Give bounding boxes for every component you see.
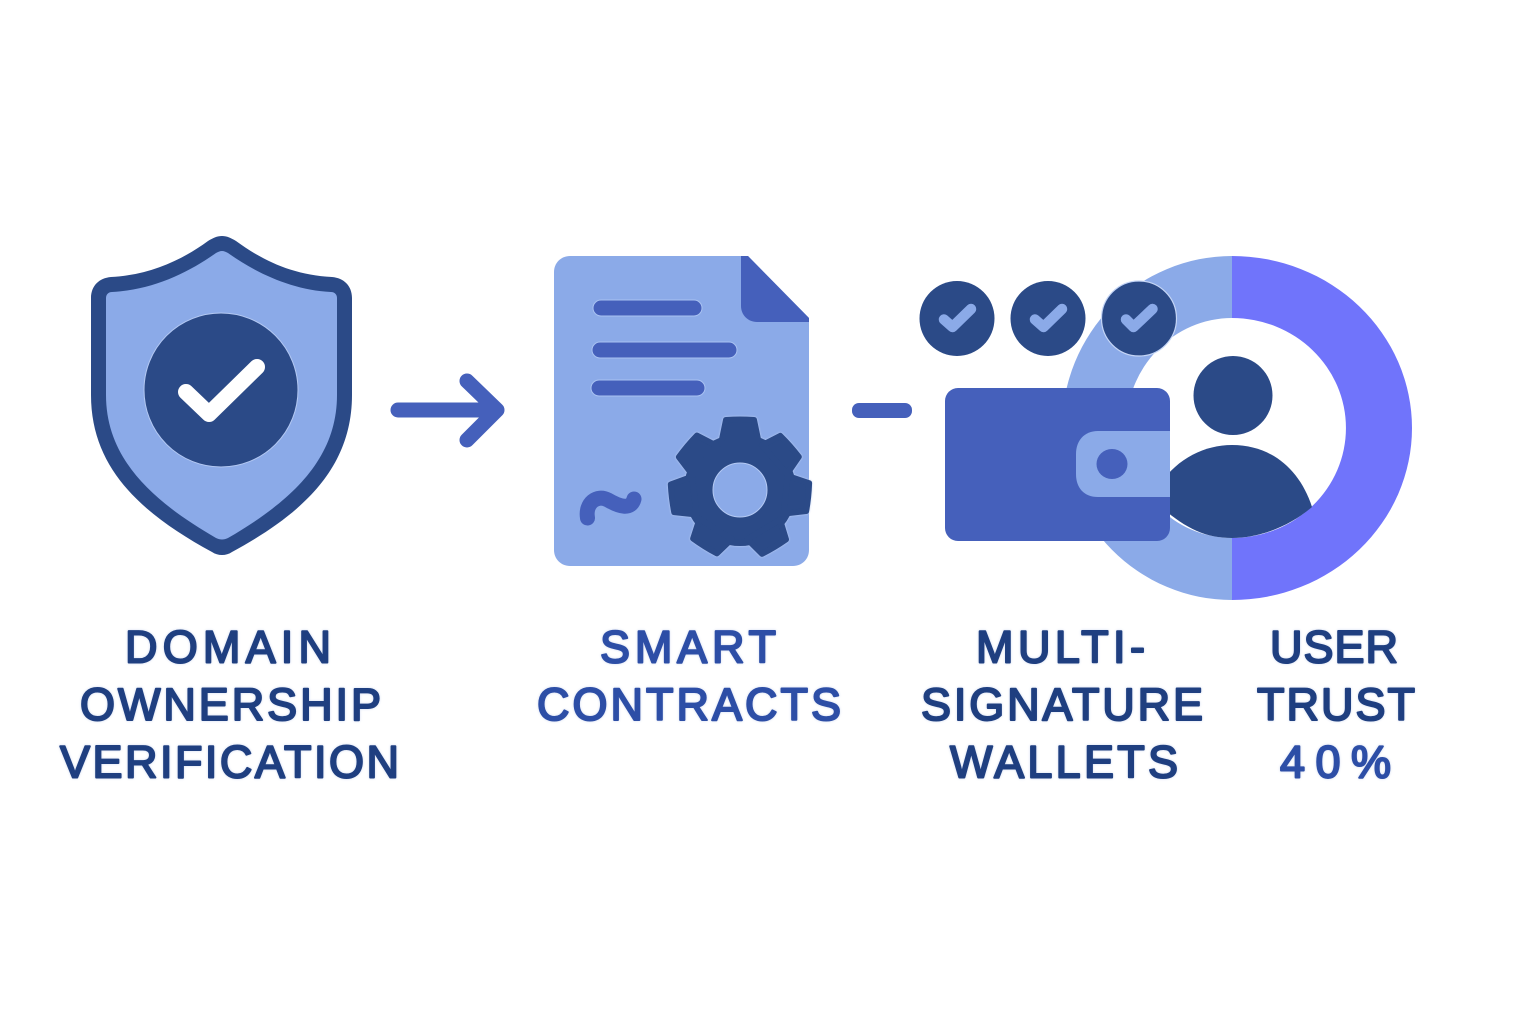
icon: signature check 3 — [1102, 281, 1176, 356]
label: smart contracts: SMART — [600, 622, 776, 672]
gear — [670, 420, 810, 557]
icon: shield with check — [91, 236, 352, 555]
label: domain ownership verification: VERIFICATION — [60, 736, 399, 788]
label: smart contracts: CONTRACTS — [537, 679, 841, 730]
label: domain ownership verification — [60, 622, 399, 788]
arrow: shield to contract — [398, 381, 497, 440]
chart: user trust donut — [1062, 256, 1412, 600]
icon: smart contract document — [554, 256, 810, 566]
icon: user — [1160, 356, 1312, 538]
wallet button — [1096, 449, 1128, 479]
document folded corner — [741, 256, 809, 322]
label: multi-signature wallets: SIGNATURE — [921, 679, 1203, 730]
connector dash — [852, 403, 912, 418]
signature squiggle — [587, 498, 634, 518]
label: user trust 40% — [1257, 622, 1415, 788]
label: multi-signature wallets — [921, 622, 1203, 788]
label: user trust 40%: USER — [1270, 622, 1398, 672]
label: domain ownership verification: DOMAIN — [125, 622, 331, 672]
label: multi-signature wallets: MULTI- — [976, 622, 1145, 672]
label: user trust 40%: 40% — [1280, 736, 1391, 788]
label: multi-signature wallets: WALLETS — [950, 736, 1178, 788]
icon: signature check 2 — [1010, 281, 1086, 356]
wallet clasp — [1076, 431, 1170, 497]
document text lines — [591, 300, 737, 396]
icon: wallet — [945, 388, 1170, 541]
label: smart contracts — [537, 622, 841, 730]
label: domain ownership verification: OWNERSHIP — [80, 679, 381, 730]
icon: signature check 1 — [920, 281, 994, 356]
label: user trust 40%: TRUST — [1257, 679, 1415, 730]
